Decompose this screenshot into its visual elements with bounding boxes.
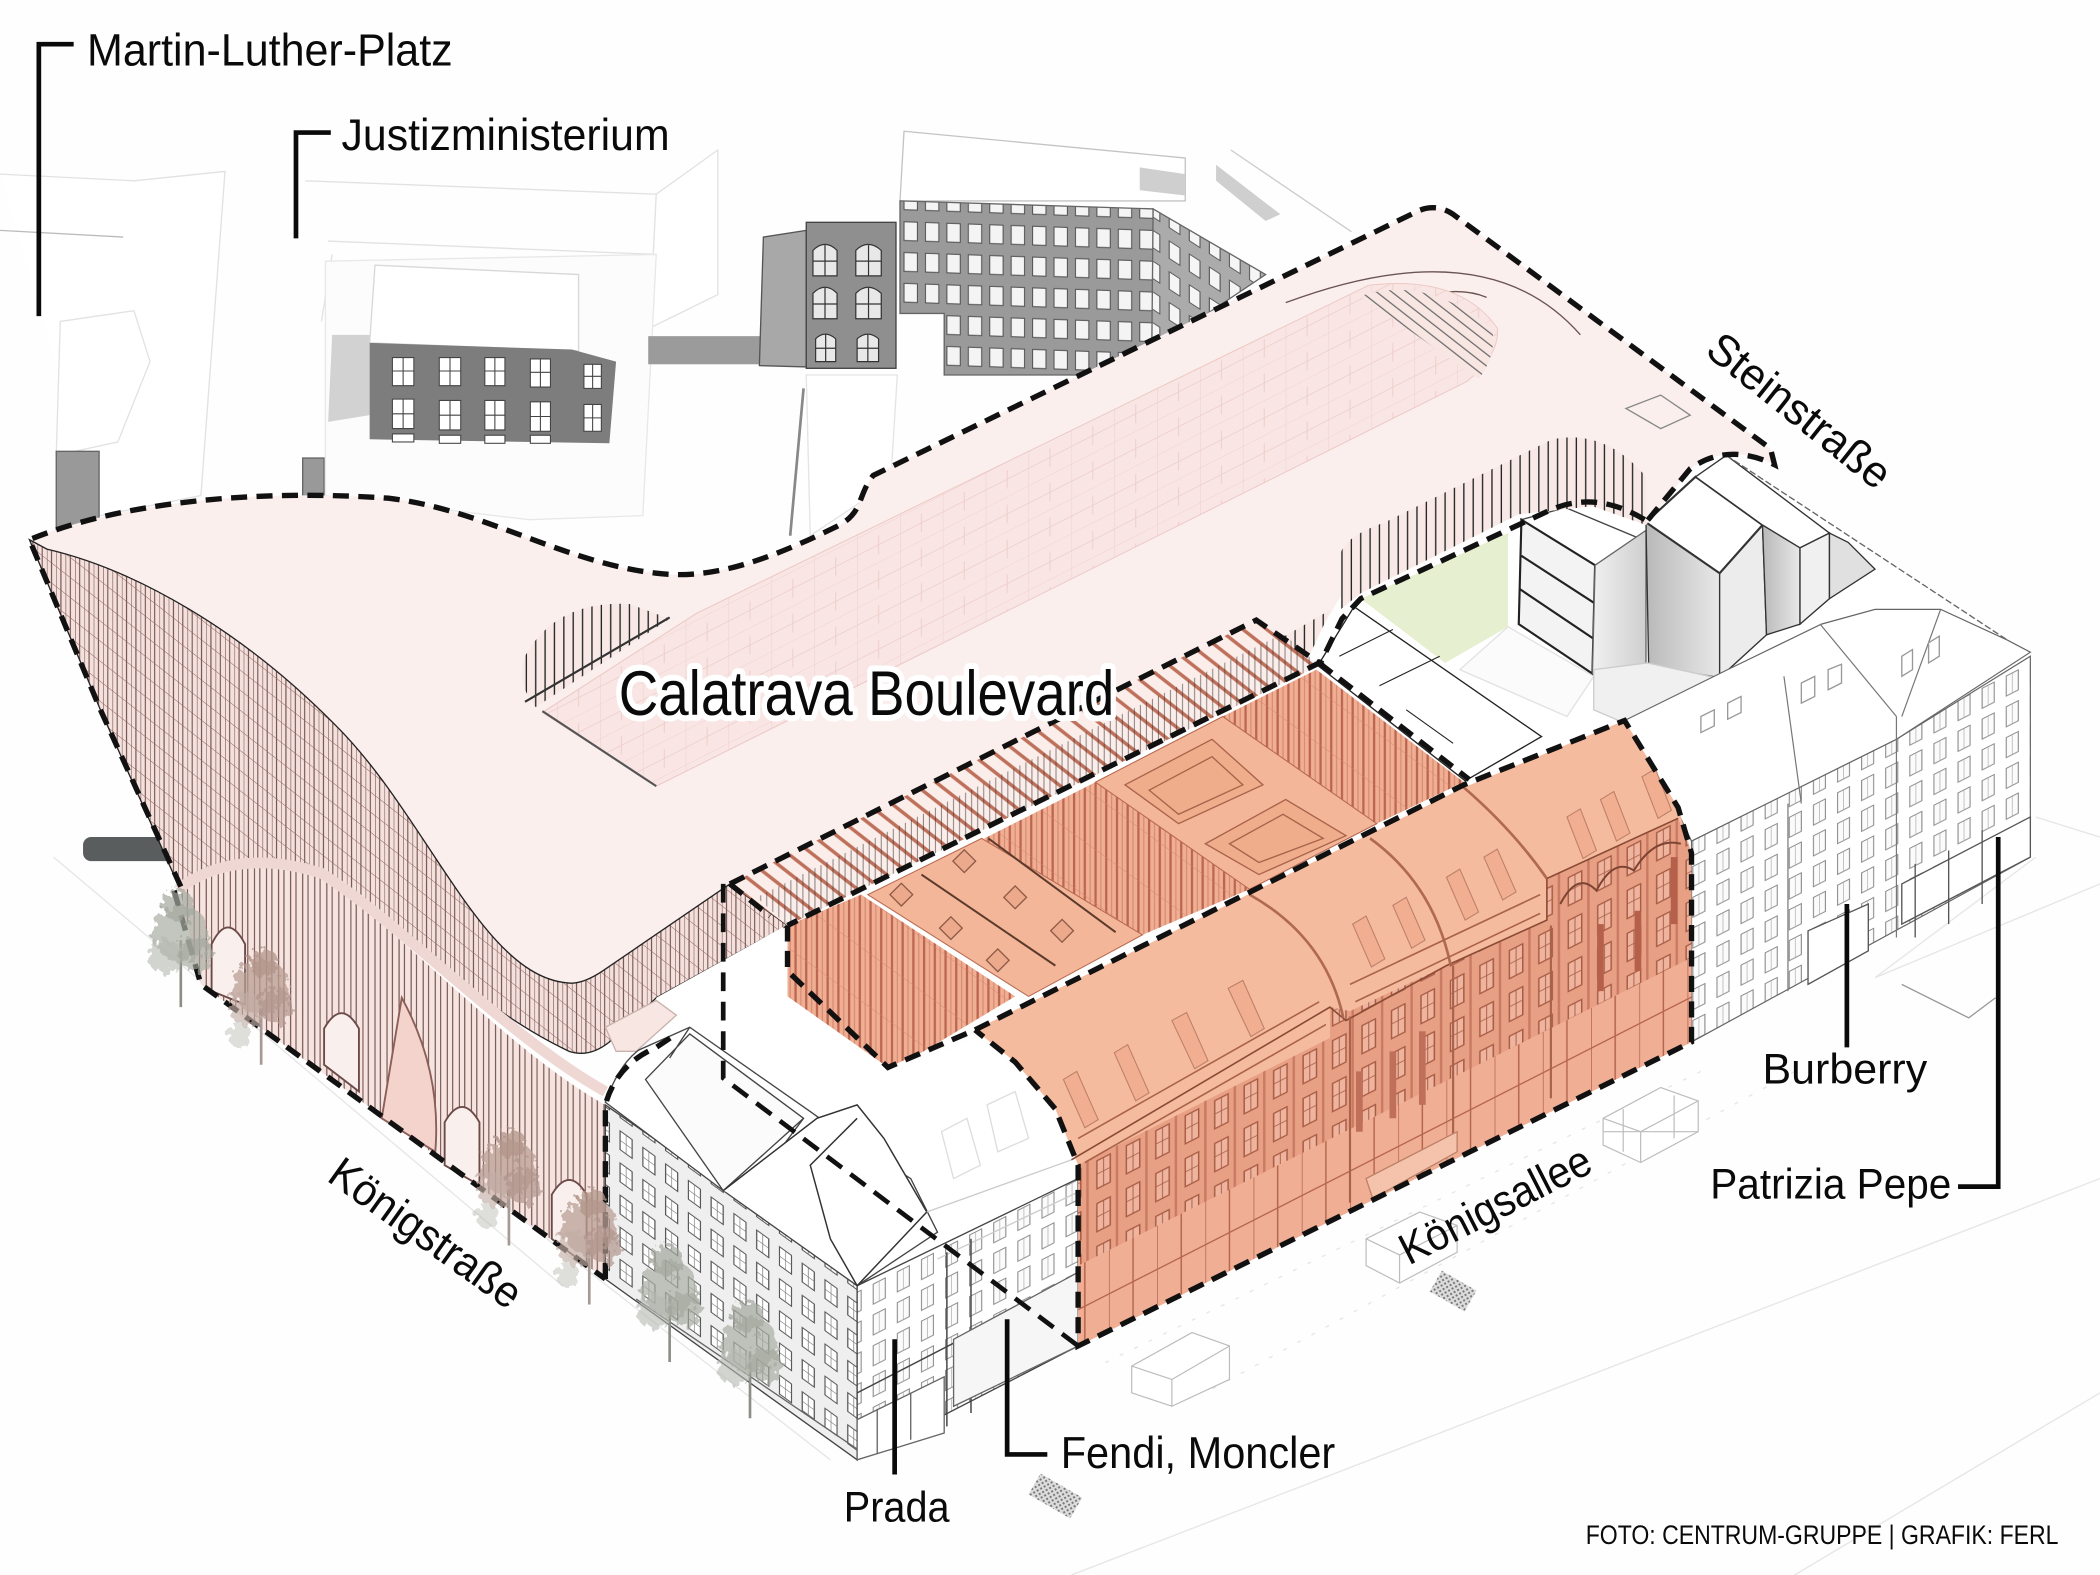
eave dormer band xyxy=(1078,895,1540,1162)
street label: Königstraße: Königstraße xyxy=(320,1148,531,1319)
dashed outline: pergola and orange section xyxy=(730,620,1692,1346)
glass roof of the boulevard xyxy=(522,283,1690,786)
roof B xyxy=(1096,717,1377,889)
dashed outline: main roof and Königstraße facade xyxy=(29,208,1775,1279)
inner courtyard and back buildings xyxy=(1318,455,1902,781)
callout: Prada: Prada xyxy=(844,1483,950,1531)
callout: Patrizia Pepe: Patrizia Pepe xyxy=(1710,1161,1951,1209)
callout: Fendi, Moncler xyxy=(1007,1319,1335,1478)
callout: Martin-Luther-Platz: Martin-Luther-Platz xyxy=(87,25,453,76)
callout: Martin-Luther-Platz xyxy=(39,25,453,316)
right-hand white buildings on Königsallee and Steinstraße xyxy=(1622,455,2030,1042)
background building: Justizministerium xyxy=(325,254,656,520)
upper facade along Königstraße xyxy=(29,540,787,1053)
background building: gray row houses xyxy=(648,222,897,536)
white courtyard block at the corner xyxy=(605,927,1078,1286)
courtyard louvres xyxy=(1341,437,1646,609)
orange courtyard hatches and roof sections xyxy=(788,670,1464,1067)
pergola xyxy=(730,620,1319,925)
street label: Königsallee: Königsallee xyxy=(1391,1136,1600,1275)
heading: Calatrava Boulevard: Calatrava Boulevard xyxy=(619,659,1114,729)
background buildings: Martin-Luther-Platz side xyxy=(0,150,718,532)
callout: Burberry: Burberry xyxy=(1762,1045,1928,1093)
street label: Steinstraße: Steinstraße xyxy=(1697,323,1901,499)
lower facade with arches xyxy=(178,863,605,1279)
dashed outline: white corner block xyxy=(723,884,1078,1346)
roof A xyxy=(868,838,1142,996)
roof windows xyxy=(1063,769,1671,1128)
callout: Justizministerium: Justizministerium xyxy=(342,111,670,160)
callout: Patrizia Pepe xyxy=(1710,837,1998,1209)
trees xyxy=(147,889,782,1418)
orange Königsallee buildings xyxy=(975,721,1692,1346)
green court wall xyxy=(1361,533,1508,663)
low white panels xyxy=(1318,607,1542,781)
callout: Fendi, Moncler: Fendi, Moncler xyxy=(1061,1429,1335,1478)
background building: gray office block xyxy=(900,131,1351,375)
callout: Justizministerium xyxy=(296,111,670,238)
ground and street context xyxy=(54,817,2100,1575)
tall gray building xyxy=(1646,455,1875,678)
small pink terrace xyxy=(605,1000,676,1051)
corner building: Prada and Fendi xyxy=(605,1027,1078,1460)
decorated gables xyxy=(1560,843,1681,904)
street pavilions xyxy=(1132,1088,1698,1406)
roof contour lines xyxy=(1286,272,1580,342)
main pink roof xyxy=(29,208,1775,983)
skylights xyxy=(1125,739,1263,824)
framed building xyxy=(1519,508,1646,674)
